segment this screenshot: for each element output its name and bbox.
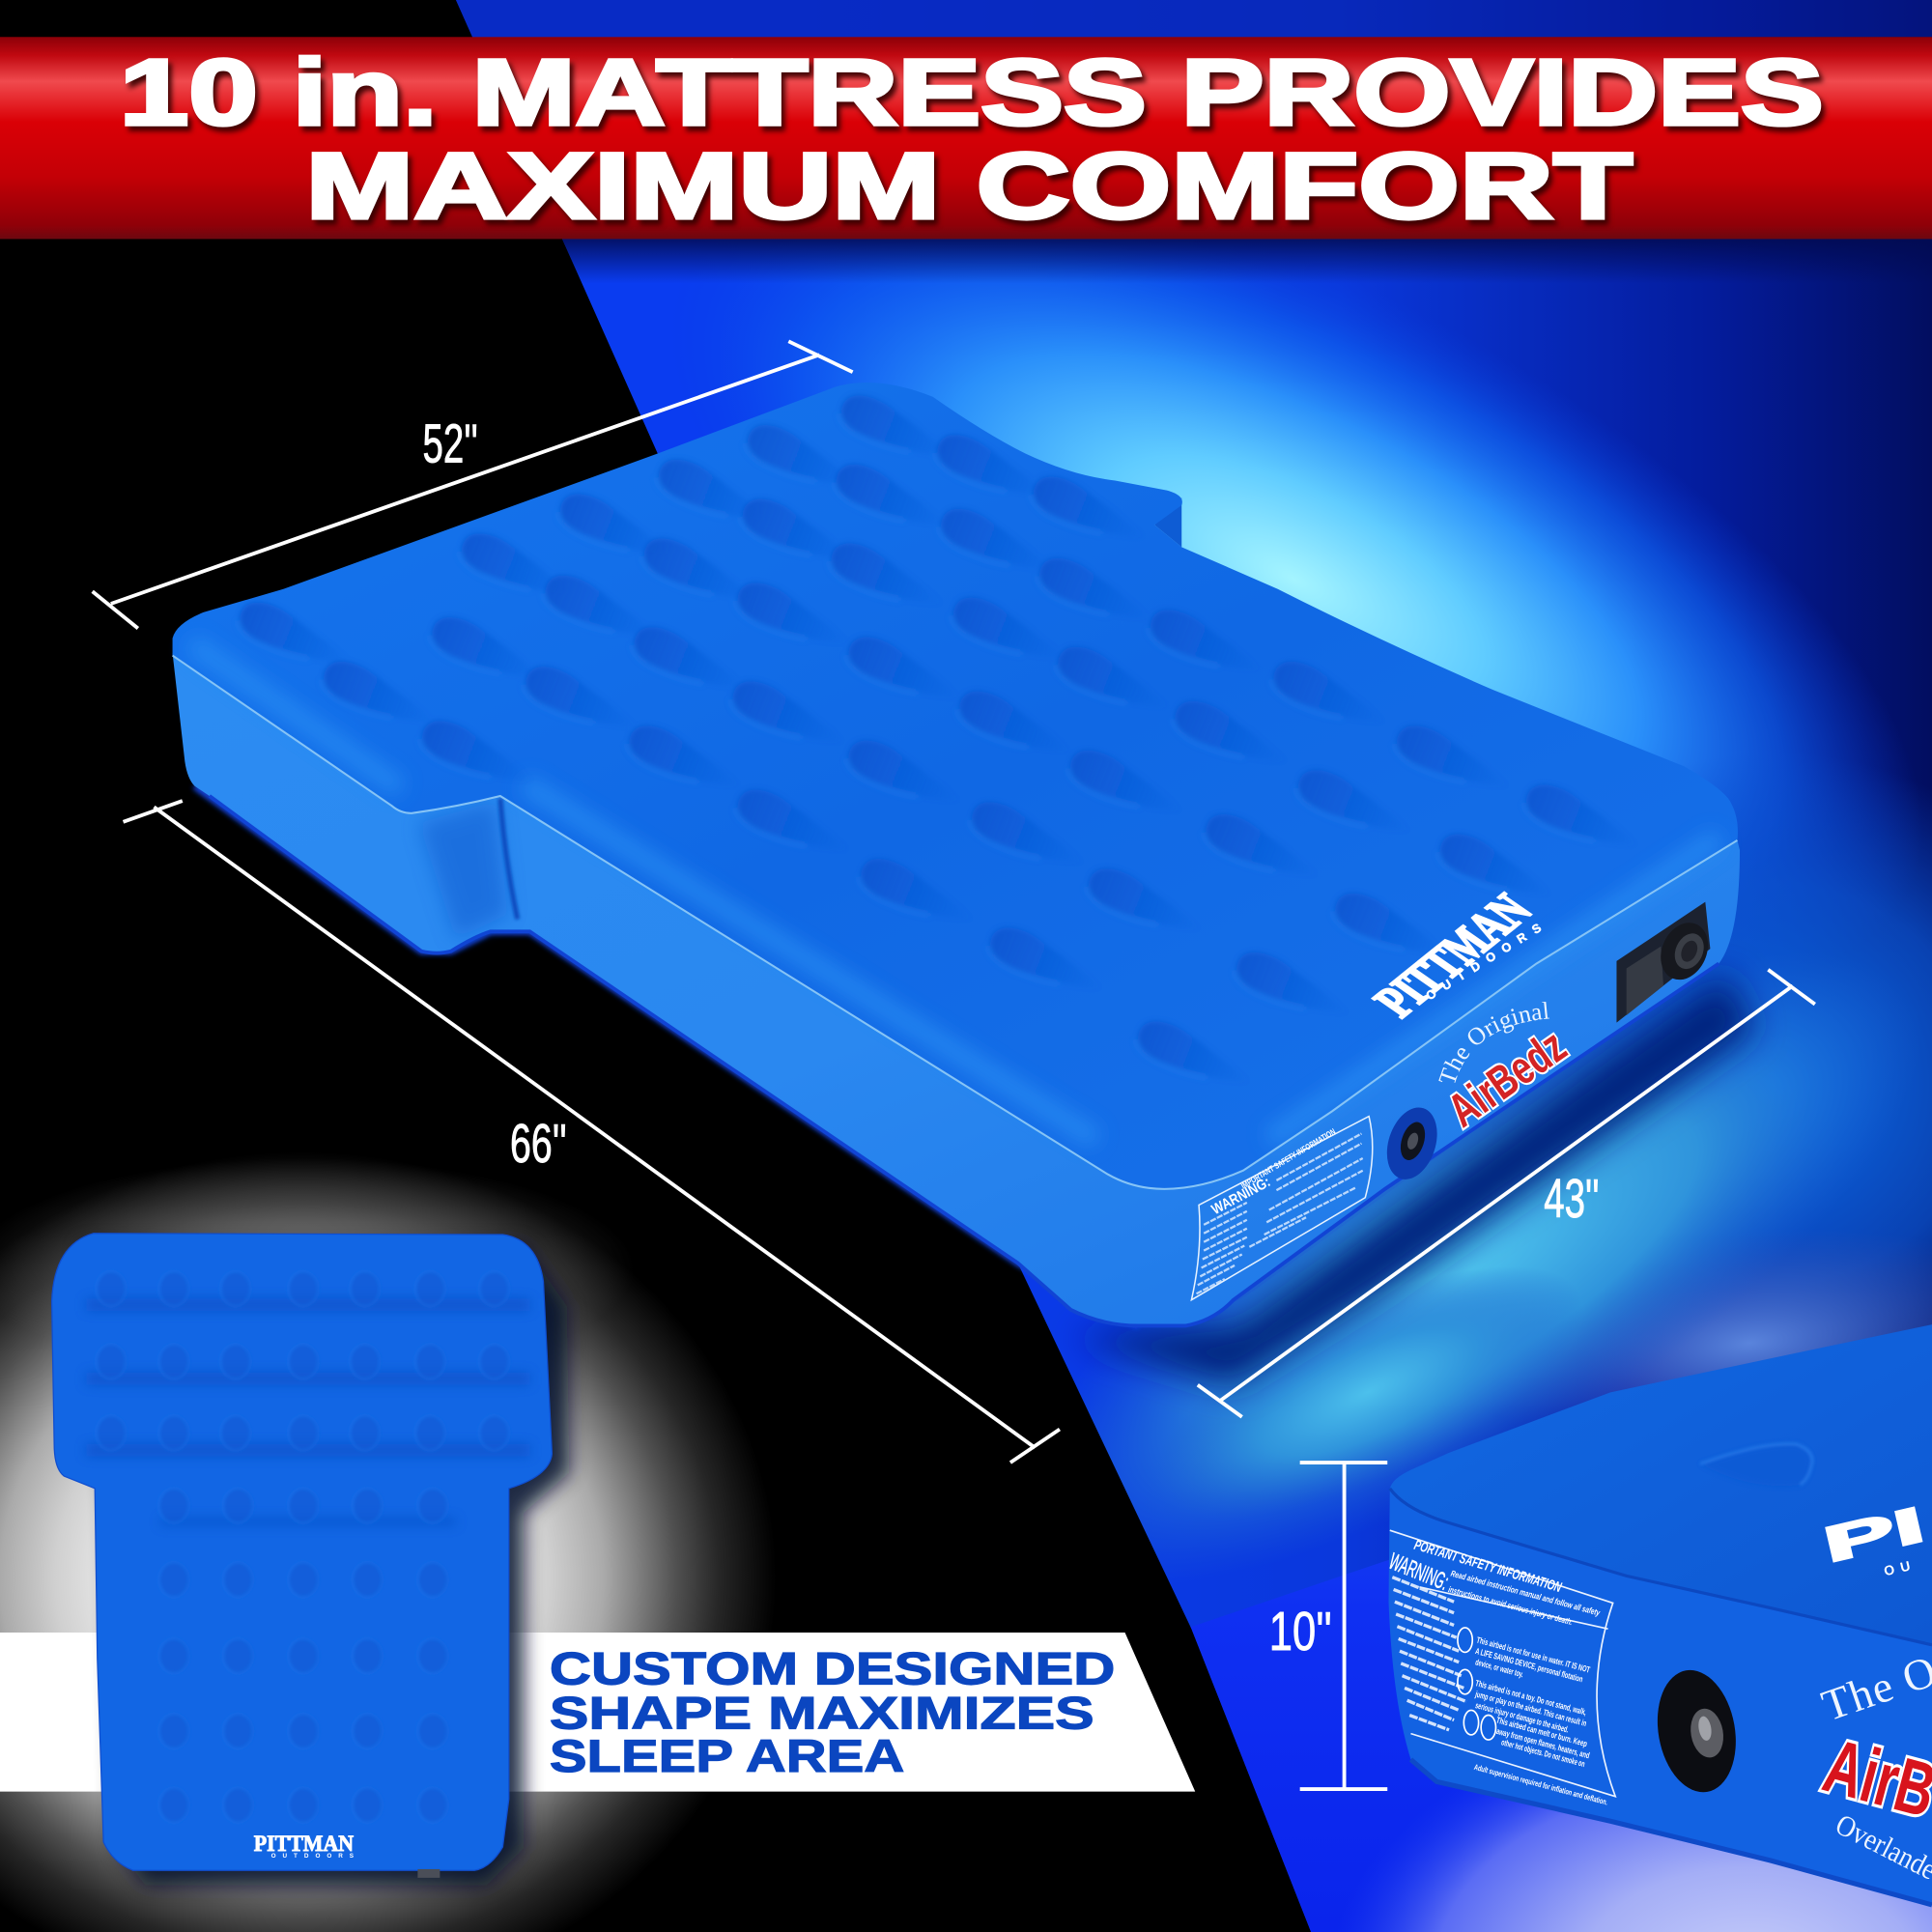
blue diagonal background panel (456, 0, 1932, 1932)
close-up warning label: WARNING: (1385, 1548, 1452, 1596)
close-up warning label: This airbed can melt or burn. Keep (1495, 1715, 1589, 1748)
callout text (550, 1644, 1115, 1782)
title: 10 in. MATTRESS PROVIDES (120, 40, 1824, 145)
Pittman logo: OUTDOORS (1423, 921, 1544, 1003)
silhouette (52, 1234, 552, 1870)
top view mattress (52, 1234, 569, 1886)
dimension: 66 inch: 66'' (510, 1113, 567, 1174)
drop shadow (81, 1244, 569, 1886)
mattress side walls (173, 653, 1740, 1325)
close-up valve (1648, 1663, 1745, 1799)
callout text: CUSTOM DESIGNED (550, 1644, 1115, 1695)
close-up Pittman logo (1819, 1496, 1929, 1578)
close-up warning label: device, or water toy. (1474, 1657, 1524, 1679)
title: MAXIMUM COMFORT (305, 133, 1633, 239)
top view Pittman logo: OUTDOORS (271, 1853, 354, 1860)
top view Pittman logo: PITTMAN (254, 1832, 354, 1856)
dimension: 43 inch: 43'' (1544, 1168, 1600, 1229)
close-up side wall (1389, 1489, 1932, 1905)
close-up warning label: away from open flames, heaters, and (1495, 1726, 1591, 1760)
close-up warning label: This airbed is not for use in water. IT IS NOT (1476, 1635, 1592, 1675)
warning label: WARNING: (1209, 1174, 1273, 1218)
close-up warning label: A LIFE SAVING DEVICE, personal flotation (1474, 1646, 1584, 1684)
close-up Pittman logo: OU (1883, 1556, 1918, 1578)
close-up bottom edge (1410, 1759, 1932, 1905)
inflation valve (1378, 1101, 1446, 1186)
under glow (195, 786, 1139, 1325)
dimension: 52 inch: 52'' (423, 412, 478, 473)
gray glow behind top view mattress (0, 1146, 813, 1932)
dimension: 52 inch (93, 341, 853, 629)
close-up warning label (1385, 1530, 1615, 1807)
white callout banner (0, 1633, 1195, 1792)
fold between flap and body (500, 799, 518, 920)
bottom edge band (210, 796, 1719, 1325)
shadow under red banner (562, 240, 1932, 280)
dimension: 10 inch: 10'' (1269, 1601, 1332, 1662)
callout text: SHAPE MAXIMIZES (550, 1689, 1094, 1740)
Pittman logo: PITTMAN (1363, 886, 1544, 1026)
close-up warning label: jump or play on the airbed. This can result in (1474, 1689, 1587, 1728)
built-in pump (1616, 902, 1717, 1023)
dimension: 66 inch (124, 801, 1060, 1463)
warning label (1191, 1117, 1373, 1300)
rim highlights (191, 643, 1719, 1140)
close-up seam (1390, 1489, 1932, 1645)
seam line (173, 656, 1737, 1189)
callout text: SLEEP AREA (550, 1731, 904, 1782)
mattress top surface (173, 383, 1738, 1189)
warning label: IMPORTANT SAFETY INFORMATION (1239, 1126, 1337, 1191)
close-up warning label: This airbed is not a toy. Do not stand, walk, (1474, 1678, 1587, 1718)
close-up dimple (1700, 1444, 1812, 1486)
close-up warning label: serious injury or damage to the airbed. (1474, 1700, 1570, 1735)
main angled mattress (134, 348, 1779, 1364)
flap back wall (1154, 497, 1181, 547)
dimple rows (233, 388, 1647, 1097)
close-up warning label: PORTANT SAFETY INFORMATION (1412, 1538, 1563, 1596)
dimples (96, 1271, 510, 1822)
close-up Pittman logo: PI (1819, 1496, 1929, 1573)
red title banner (0, 37, 1932, 239)
close-up top surface (1390, 1324, 1932, 1645)
The Original AirBedz logo: AirBedz (1438, 1020, 1576, 1137)
close-up warning label: other hot objects. Do not smoke on (1500, 1737, 1586, 1769)
head bands (86, 1298, 529, 1525)
close-up warning label: instructions to avoid serious injury or death. (1447, 1584, 1574, 1627)
The Original AirBedz logo: The Original (1438, 1002, 1549, 1083)
close-up mattress corner (1385, 1324, 1932, 1905)
small pump fitting (417, 1869, 440, 1878)
dimension: 43 inch (1198, 970, 1815, 1417)
close-up warning label: Read airbed instruction manual and follow all safety (1450, 1569, 1602, 1618)
dimension: 10 inch (1269, 1463, 1387, 1789)
close-up warning label: Adult supervision required for inflation and deflation. (1473, 1762, 1609, 1807)
title (120, 40, 1824, 239)
Pittman logo (1363, 886, 1544, 1026)
